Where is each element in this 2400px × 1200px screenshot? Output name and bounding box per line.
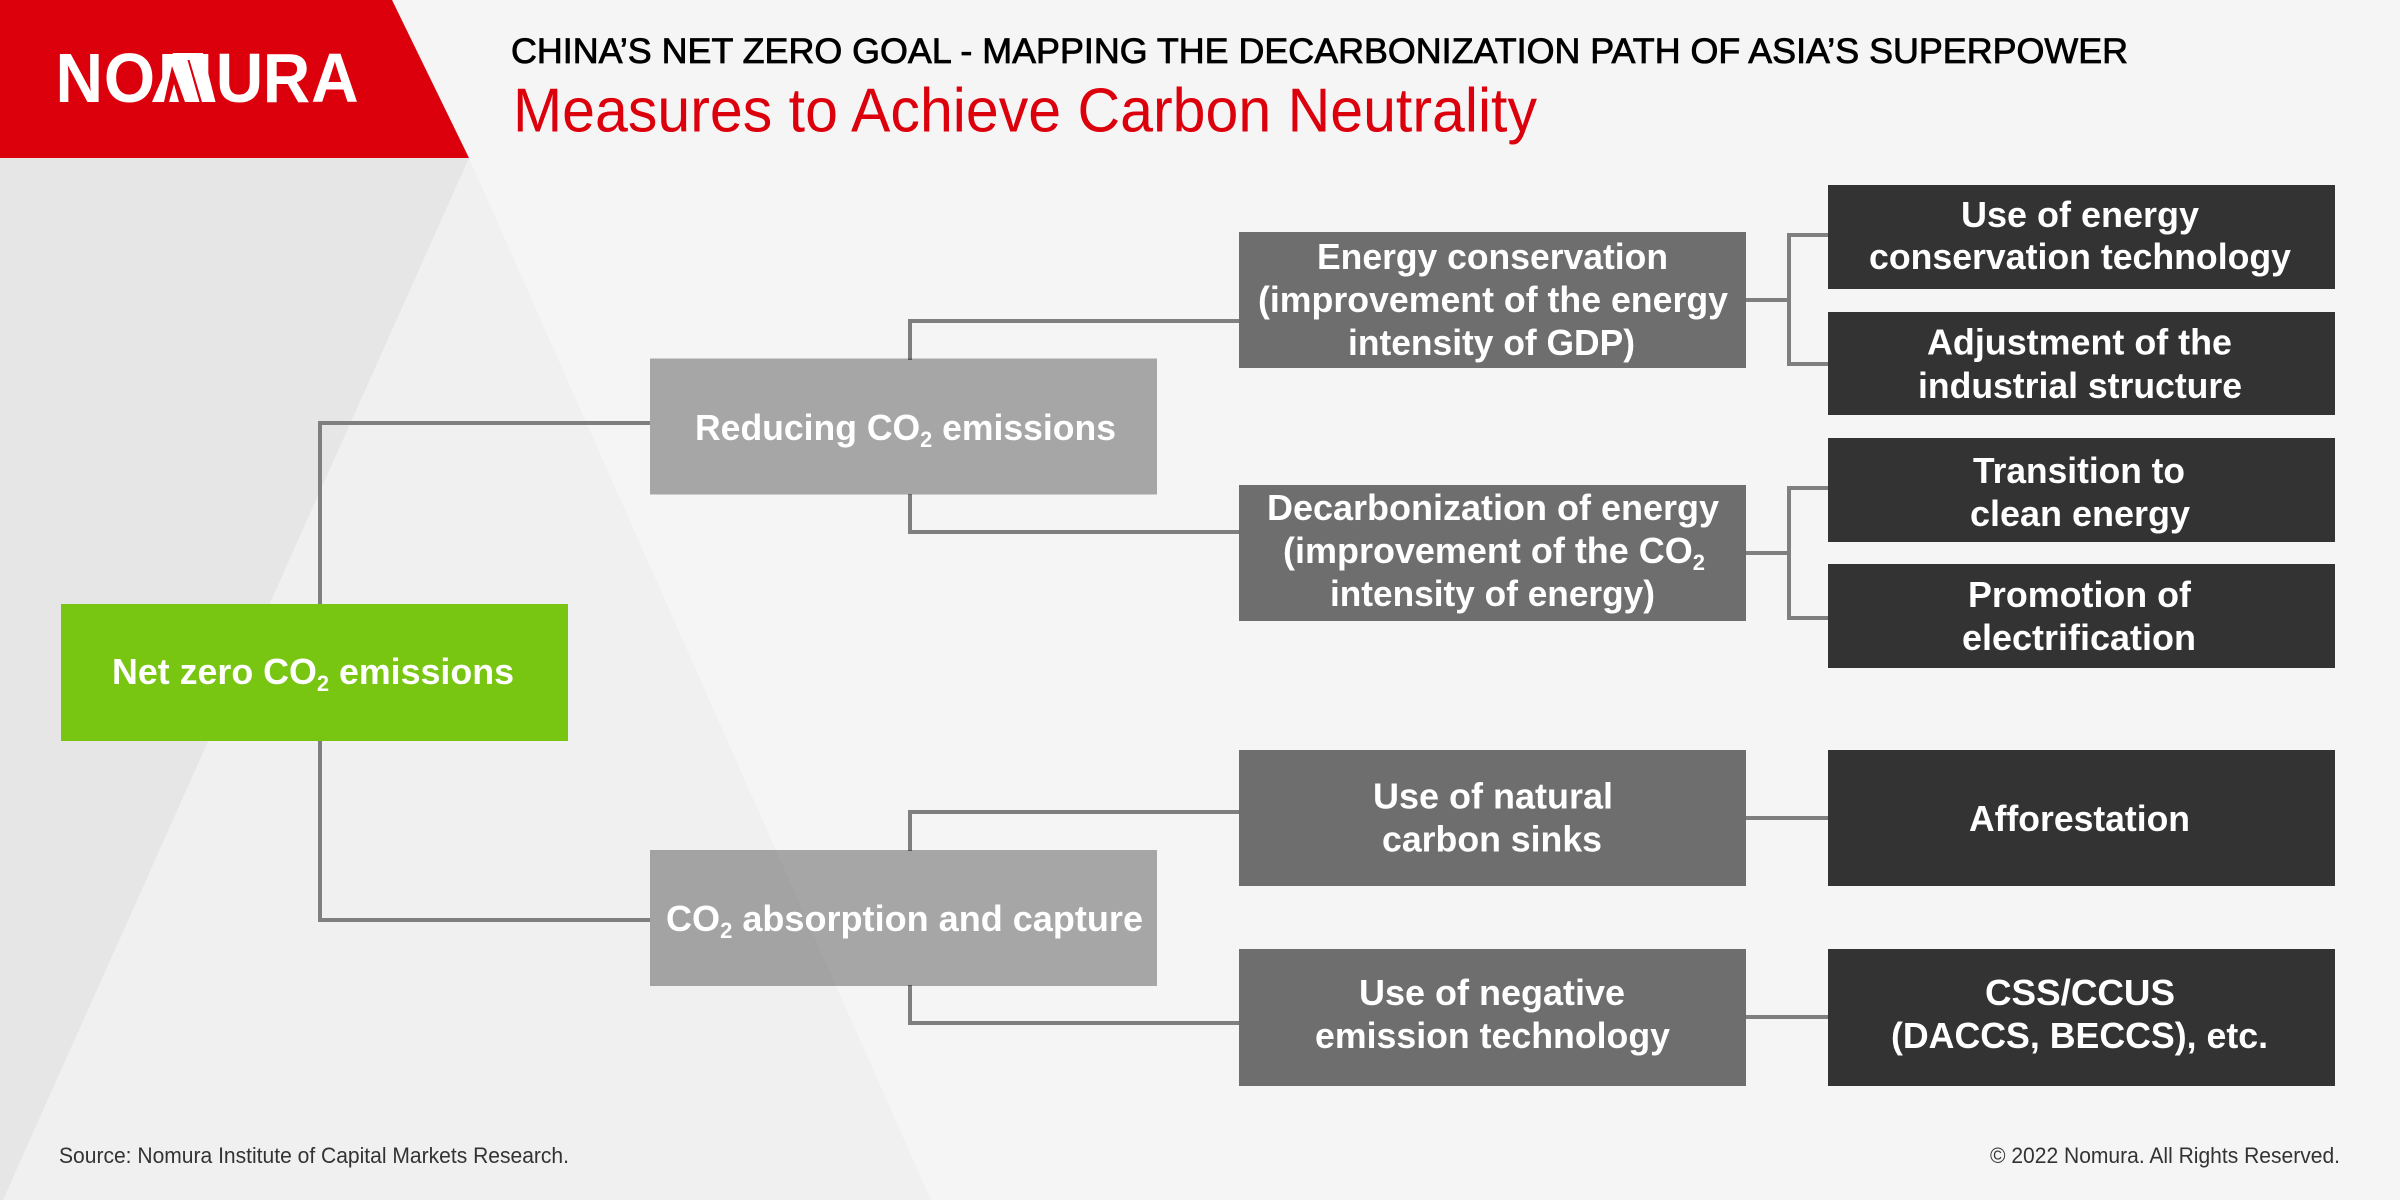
box: decarbonization of energy: (improvement of the CO [1283,530,1693,571]
box: use of negative emission technology [1239,949,1746,1086]
box: energy conservation [1239,232,1746,368]
box: CSS/CCUS: (DACCS, BECCS), etc. [1891,1015,2268,1056]
box: net zero CO2 emissions: 2 [317,671,329,696]
box: use of energy conservation technology: Use of energy [1961,194,2199,235]
box: CSS/CCUS: CSS/CCUS [1985,972,2175,1013]
box: energy conservation: intensity of GDP) [1348,322,1635,363]
box: reducing CO2 emissions: Reducing CO [695,407,923,448]
box: decarbonization of energy: intensity of energy) [1330,573,1655,614]
box: decarbonization of energy [1239,485,1746,621]
box: CO2 absorption and capture [650,850,1157,986]
box: CO2 absorption and capture: 2 [720,918,732,943]
box: CO2 absorption and capture: CO [666,898,720,939]
box: promotion of electrification: Promotion of [1968,574,2192,615]
box: net zero CO2 emissions [61,604,568,741]
connector: natural carbon sinks to afforestation [1746,816,1828,820]
box: use of negative emission technology: Use of negative [1359,972,1625,1013]
box: decarbonization of energy: 2 [1693,550,1705,575]
box: adjustment of the industrial structure [1828,312,2335,415]
box: use of natural carbon sinks [1239,750,1746,886]
copyright note: © 2022 Nomura. All Rights Reserved. [1990,1143,2340,1168]
connector: absorption branch to children [910,812,1239,1023]
box: use of negative emission technology: emission technology [1315,1015,1670,1056]
box: reducing CO2 emissions [650,358,1157,494]
source note: Source: Nomura Institute of Capital Markets Research. [59,1143,569,1168]
box: reducing CO2 emissions: emissions [932,407,1116,448]
box: energy conservation: (improvement of the energy [1258,279,1728,320]
box: afforestation [1828,750,2335,886]
box: CSS/CCUS [1828,949,2335,1086]
box: use of natural carbon sinks: carbon sinks [1382,818,1602,860]
connector: negative emission technology to CCUS [1746,1015,1828,1019]
connector: energy conservation to leaves [1746,235,1828,364]
box: transition to clean energy: Transition to [1973,450,2185,491]
box: promotion of electrification: electrification [1962,617,2196,658]
box: CO2 absorption and capture: absorption and capture [732,898,1143,939]
box: decarbonization of energy: Decarbonization of energy [1267,487,1719,528]
box: energy conservation: Energy conservation [1317,236,1668,277]
connector: reducing branch to children [910,321,1239,532]
box: afforestation: Afforestation [1969,798,2190,839]
box: use of natural carbon sinks: Use of natural [1373,776,1613,816]
box: reducing CO2 emissions: 2 [920,427,932,452]
box: net zero CO2 emissions: Net zero CO [112,651,318,692]
box: use of energy conservation technology [1828,185,2335,289]
connector: root to branches [320,423,650,920]
logo banner: Nomura [0,0,469,158]
connector: decarbonization to leaves [1746,488,1828,618]
logo banner: Nomura: NOMURA [55,40,359,117]
box: net zero CO2 emissions: emissions [329,651,514,692]
title: report name: CHINA’S NET ZERO GOAL - MAPPING THE DECARBONIZATION PATH OF ASIA’S SUPERPOWER [511,32,2128,71]
box: transition to clean energy: clean energy [1970,493,2190,534]
box: adjustment of the industrial structure: industrial structure [1918,365,2242,406]
box: transition to clean energy [1828,438,2335,542]
heading: measures to achieve carbon neutrality: Measures to Achieve Carbon Neutrality [513,76,1537,146]
box: adjustment of the industrial structure: Adjustment of the [1927,322,2232,362]
box: use of energy conservation technology: conservation technology [1869,236,2291,277]
box: promotion of electrification [1828,564,2335,668]
